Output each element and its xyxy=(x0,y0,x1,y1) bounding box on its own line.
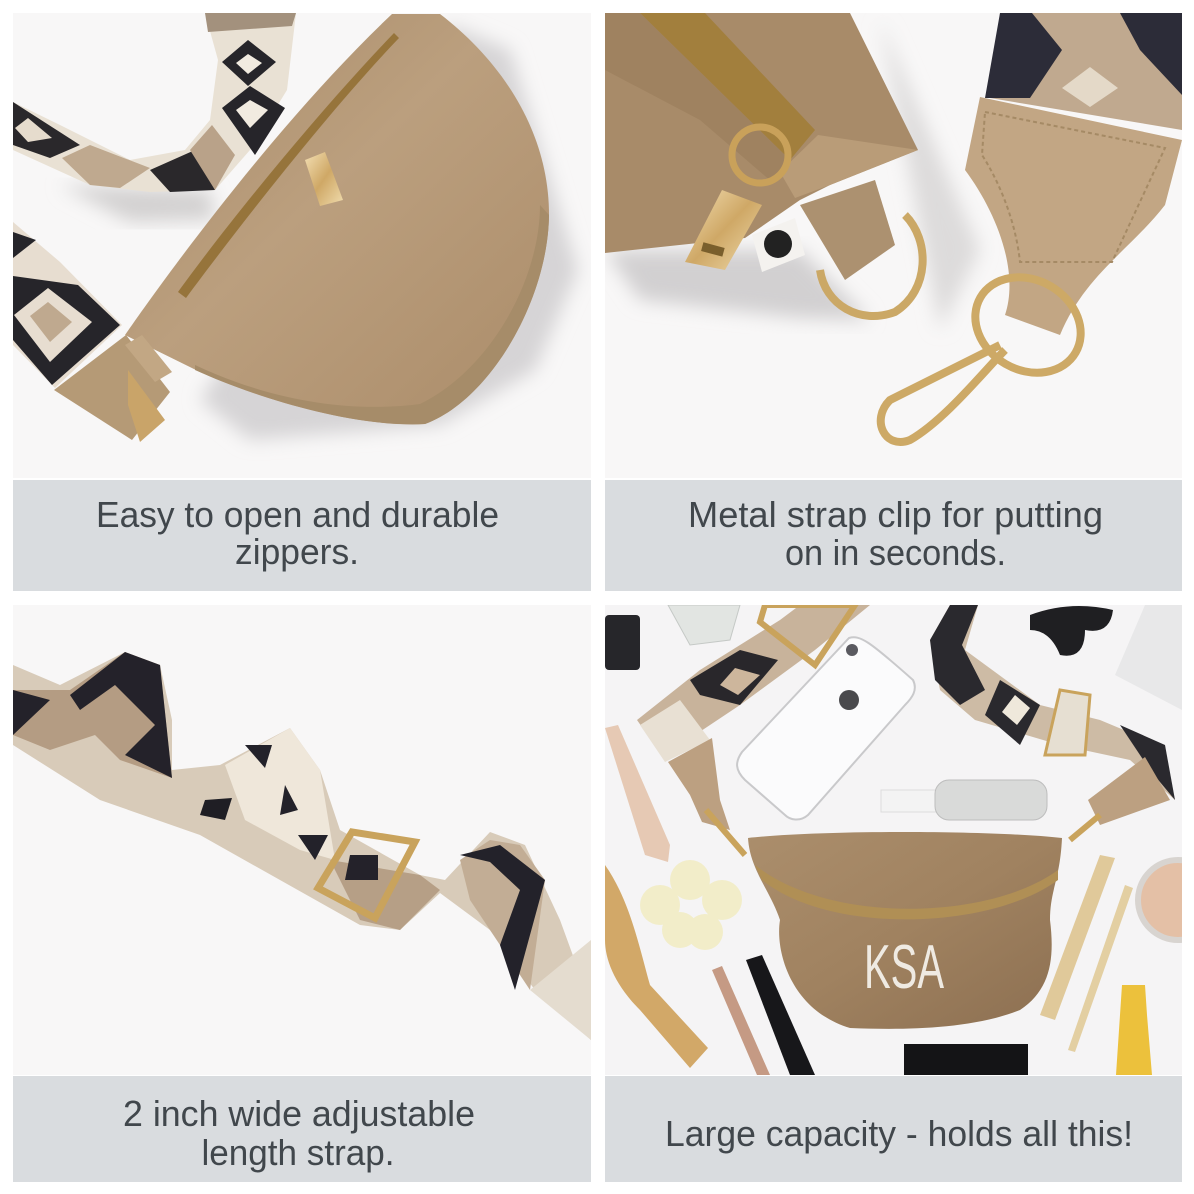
strap upper xyxy=(13,13,296,192)
zipper pull xyxy=(305,152,343,206)
panel: contents flat lay photo xyxy=(605,605,1194,1075)
right leather tab xyxy=(1088,757,1170,825)
leather tab xyxy=(965,97,1182,335)
black compact xyxy=(904,1044,1028,1075)
ribbon strap xyxy=(13,652,591,1040)
oil sheets xyxy=(1115,605,1182,710)
caption: capacity xyxy=(605,1076,1182,1182)
monogrammed bag: KSA xyxy=(864,933,944,1002)
flower clip xyxy=(640,860,742,950)
caption: zippers: zippers. xyxy=(235,531,359,572)
phone xyxy=(737,637,915,820)
perfume bottle xyxy=(668,605,740,645)
black comb clip xyxy=(605,615,640,670)
panel: strap photo xyxy=(13,652,591,1040)
caption: strap clip: on in seconds. xyxy=(785,532,1006,573)
sanitizer bottle xyxy=(881,780,1047,820)
caption: strap xyxy=(13,1076,591,1182)
caption: zippers: Easy to open and durable xyxy=(96,494,499,535)
left strap xyxy=(637,605,870,762)
strap lower xyxy=(13,222,170,440)
monogrammed bag xyxy=(748,832,1062,1029)
panel: strap clip photo xyxy=(605,13,1182,478)
D ring xyxy=(800,180,923,316)
caption: strap clip: Metal strap clip for putting xyxy=(688,494,1103,535)
shadow xyxy=(605,250,870,320)
wood hairbrush xyxy=(605,865,708,1068)
bag corner xyxy=(605,13,918,253)
clip xyxy=(128,370,165,442)
caption: capacity: Large capacity - holds all this! xyxy=(665,1113,1133,1154)
cream tube xyxy=(605,725,670,862)
makeup tools xyxy=(712,855,1133,1075)
caption: strap: 2 inch wide adjustable xyxy=(123,1093,475,1134)
printed strap xyxy=(985,13,1182,130)
left leather tab xyxy=(668,738,730,830)
bag body xyxy=(125,14,549,424)
right strap xyxy=(930,605,1175,800)
black flower clip xyxy=(1030,606,1113,656)
strap buckle xyxy=(318,832,415,918)
powder compact xyxy=(1138,860,1194,940)
panel: zippers photo xyxy=(13,13,591,478)
caption: strap: length strap. xyxy=(202,1132,394,1173)
sunscreen bottle xyxy=(1116,985,1152,1075)
label tag xyxy=(756,246,805,272)
zipper xyxy=(178,33,399,298)
swivel clasp xyxy=(881,259,1098,442)
zipper pull xyxy=(685,127,788,270)
clasp chains xyxy=(706,810,1100,855)
caption: strap clip xyxy=(605,480,1182,591)
shadow xyxy=(200,25,578,440)
caption: zippers xyxy=(13,480,591,591)
